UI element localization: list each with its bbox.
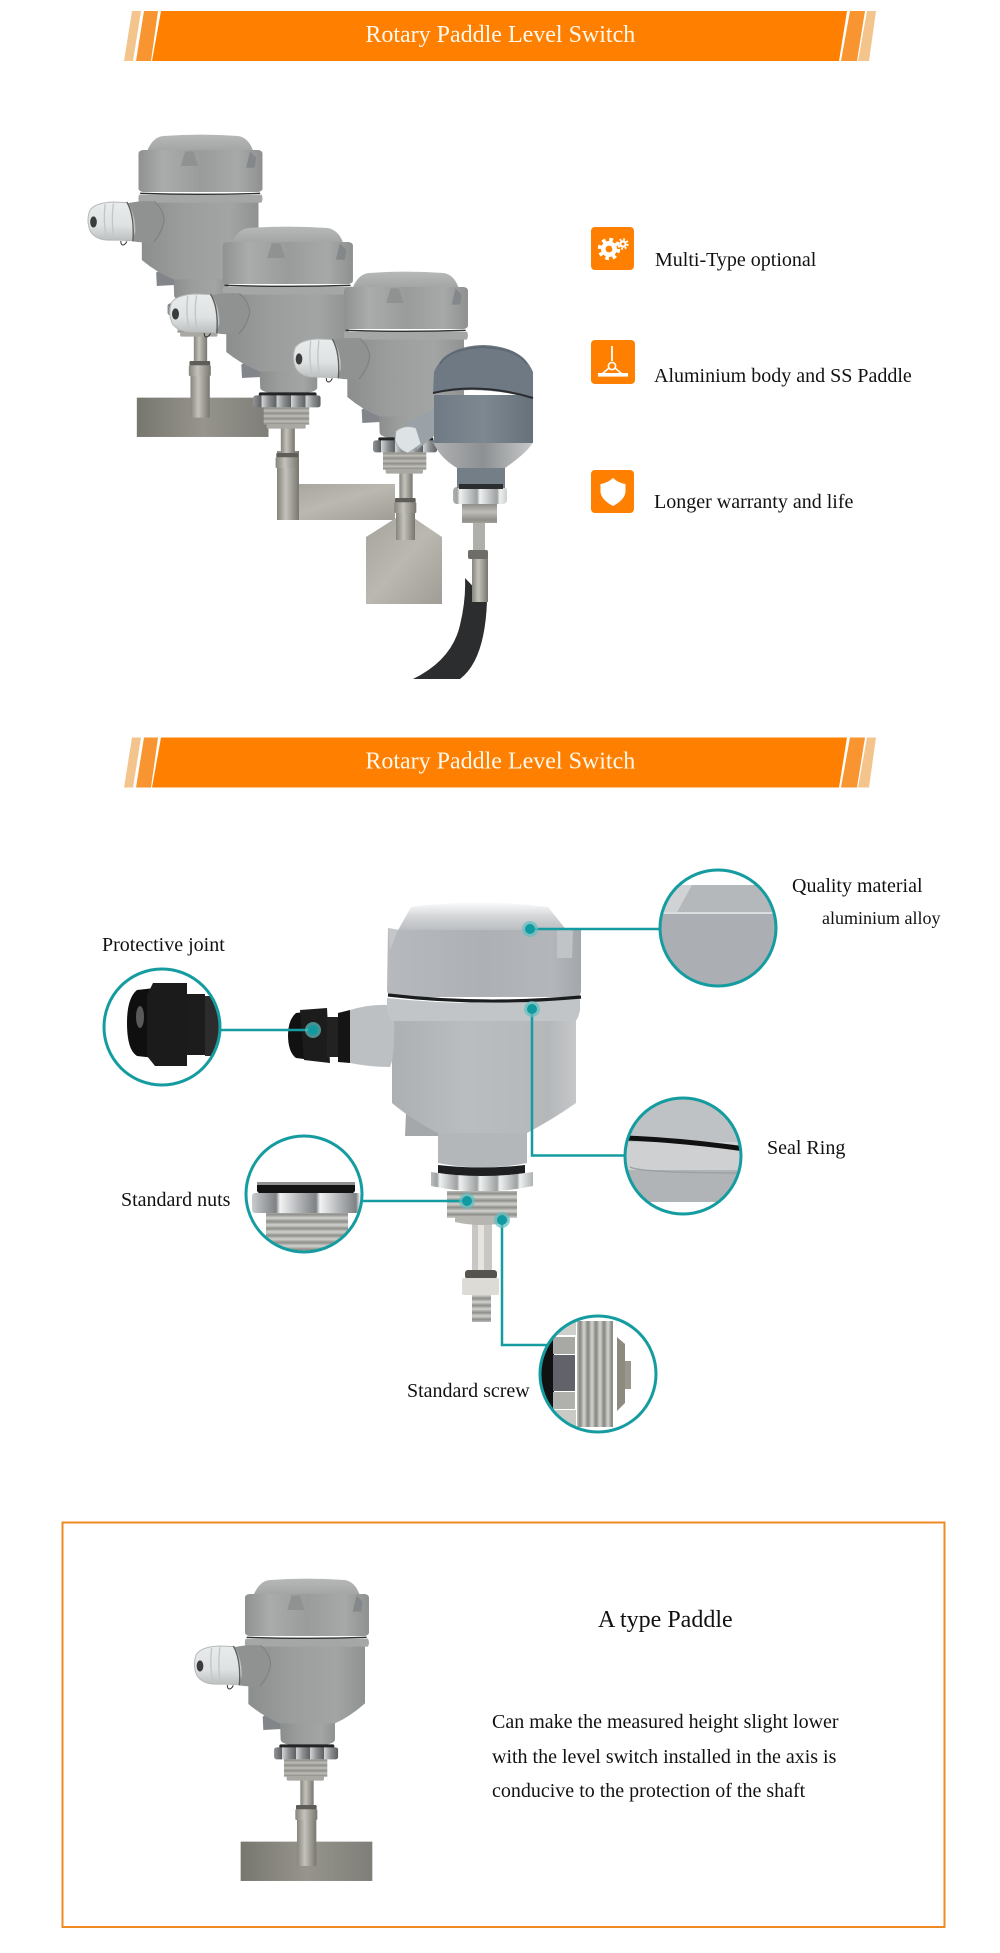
body xyxy=(392,1015,576,1133)
label: Standard nuts xyxy=(121,1189,231,1211)
inset: screw close-up xyxy=(542,1321,631,1427)
label line 2: aluminium alloy xyxy=(822,908,940,928)
leader line xyxy=(220,1029,313,1031)
icon: weld hook xyxy=(591,340,635,384)
cover xyxy=(387,928,581,997)
flange xyxy=(387,998,580,1021)
inset: gland close-up xyxy=(127,983,221,1066)
banner: second heading xyxy=(124,738,876,788)
ring xyxy=(246,1136,362,1252)
dome xyxy=(397,902,568,932)
feature: longer warranty and life xyxy=(591,470,853,513)
neck, seal ring, nut and thread xyxy=(431,1125,533,1225)
switch 3 with shovel paddle xyxy=(293,272,468,604)
icon: shield xyxy=(591,470,634,513)
seal ring xyxy=(388,995,581,1001)
inset: seal ring close-up xyxy=(626,1100,740,1202)
label: Protective joint xyxy=(102,934,225,956)
ring xyxy=(540,1316,656,1432)
black cable gland xyxy=(288,1008,350,1063)
leader line xyxy=(362,1200,467,1202)
ring xyxy=(660,870,776,986)
heading text: Rotary Paddle Level Switch xyxy=(365,748,635,774)
marker dot xyxy=(494,1212,510,1228)
switch 4 with blue-grey head and flexible belt xyxy=(395,345,533,679)
callout: seal ring xyxy=(524,1001,845,1214)
ring xyxy=(625,1098,741,1214)
marker dot xyxy=(524,1001,540,1017)
panel title: A type Paddle xyxy=(598,1607,733,1633)
panel: A type paddle xyxy=(62,1522,944,1927)
mounting tab xyxy=(405,1113,442,1136)
label: Standard screw xyxy=(407,1380,530,1402)
callout: quality material xyxy=(522,870,940,989)
leader line xyxy=(530,928,660,930)
banner: top heading xyxy=(124,11,876,61)
ring xyxy=(104,969,220,1085)
product image: four paddle level switches xyxy=(88,135,533,679)
label: Seal Ring xyxy=(767,1137,845,1159)
inset: cover close-up xyxy=(662,885,774,984)
feature: multi-type optional xyxy=(591,227,817,271)
label: Multi-Type optional xyxy=(655,249,817,271)
product image: switch with callouts base xyxy=(288,902,581,1322)
leader line xyxy=(502,1220,547,1345)
product image: T paddle switch xyxy=(194,1579,372,1881)
heading text: Rotary Paddle Level Switch xyxy=(365,22,635,48)
switch 2 with L paddle xyxy=(170,227,395,520)
feature: aluminium body and SS paddle xyxy=(591,340,912,387)
label: Aluminium body and SS Paddle xyxy=(654,365,912,387)
panel description: with the level switch installed in the axis is xyxy=(492,1746,837,1768)
panel description: conducive to the protection of the shaft xyxy=(492,1780,806,1802)
callout: standard nuts xyxy=(121,1136,475,1253)
panel description: Can make the measured height slight lower xyxy=(492,1711,839,1733)
callout: standard screw xyxy=(407,1212,656,1434)
icon: gears xyxy=(591,227,634,270)
cover notches xyxy=(388,928,573,958)
panel border xyxy=(62,1522,944,1927)
leader line xyxy=(532,1009,626,1156)
marker dot xyxy=(522,921,538,937)
inset: nut close-up xyxy=(252,1182,361,1253)
marker dot xyxy=(305,1022,321,1038)
stem and bolt xyxy=(462,1222,499,1322)
label line 1: Quality material xyxy=(792,875,923,897)
callout: protective joint xyxy=(102,934,321,1085)
conduit arm xyxy=(350,1005,394,1067)
switch 1 with T paddle xyxy=(88,135,268,437)
marker dot xyxy=(459,1193,475,1209)
label: Longer warranty and life xyxy=(654,491,853,513)
